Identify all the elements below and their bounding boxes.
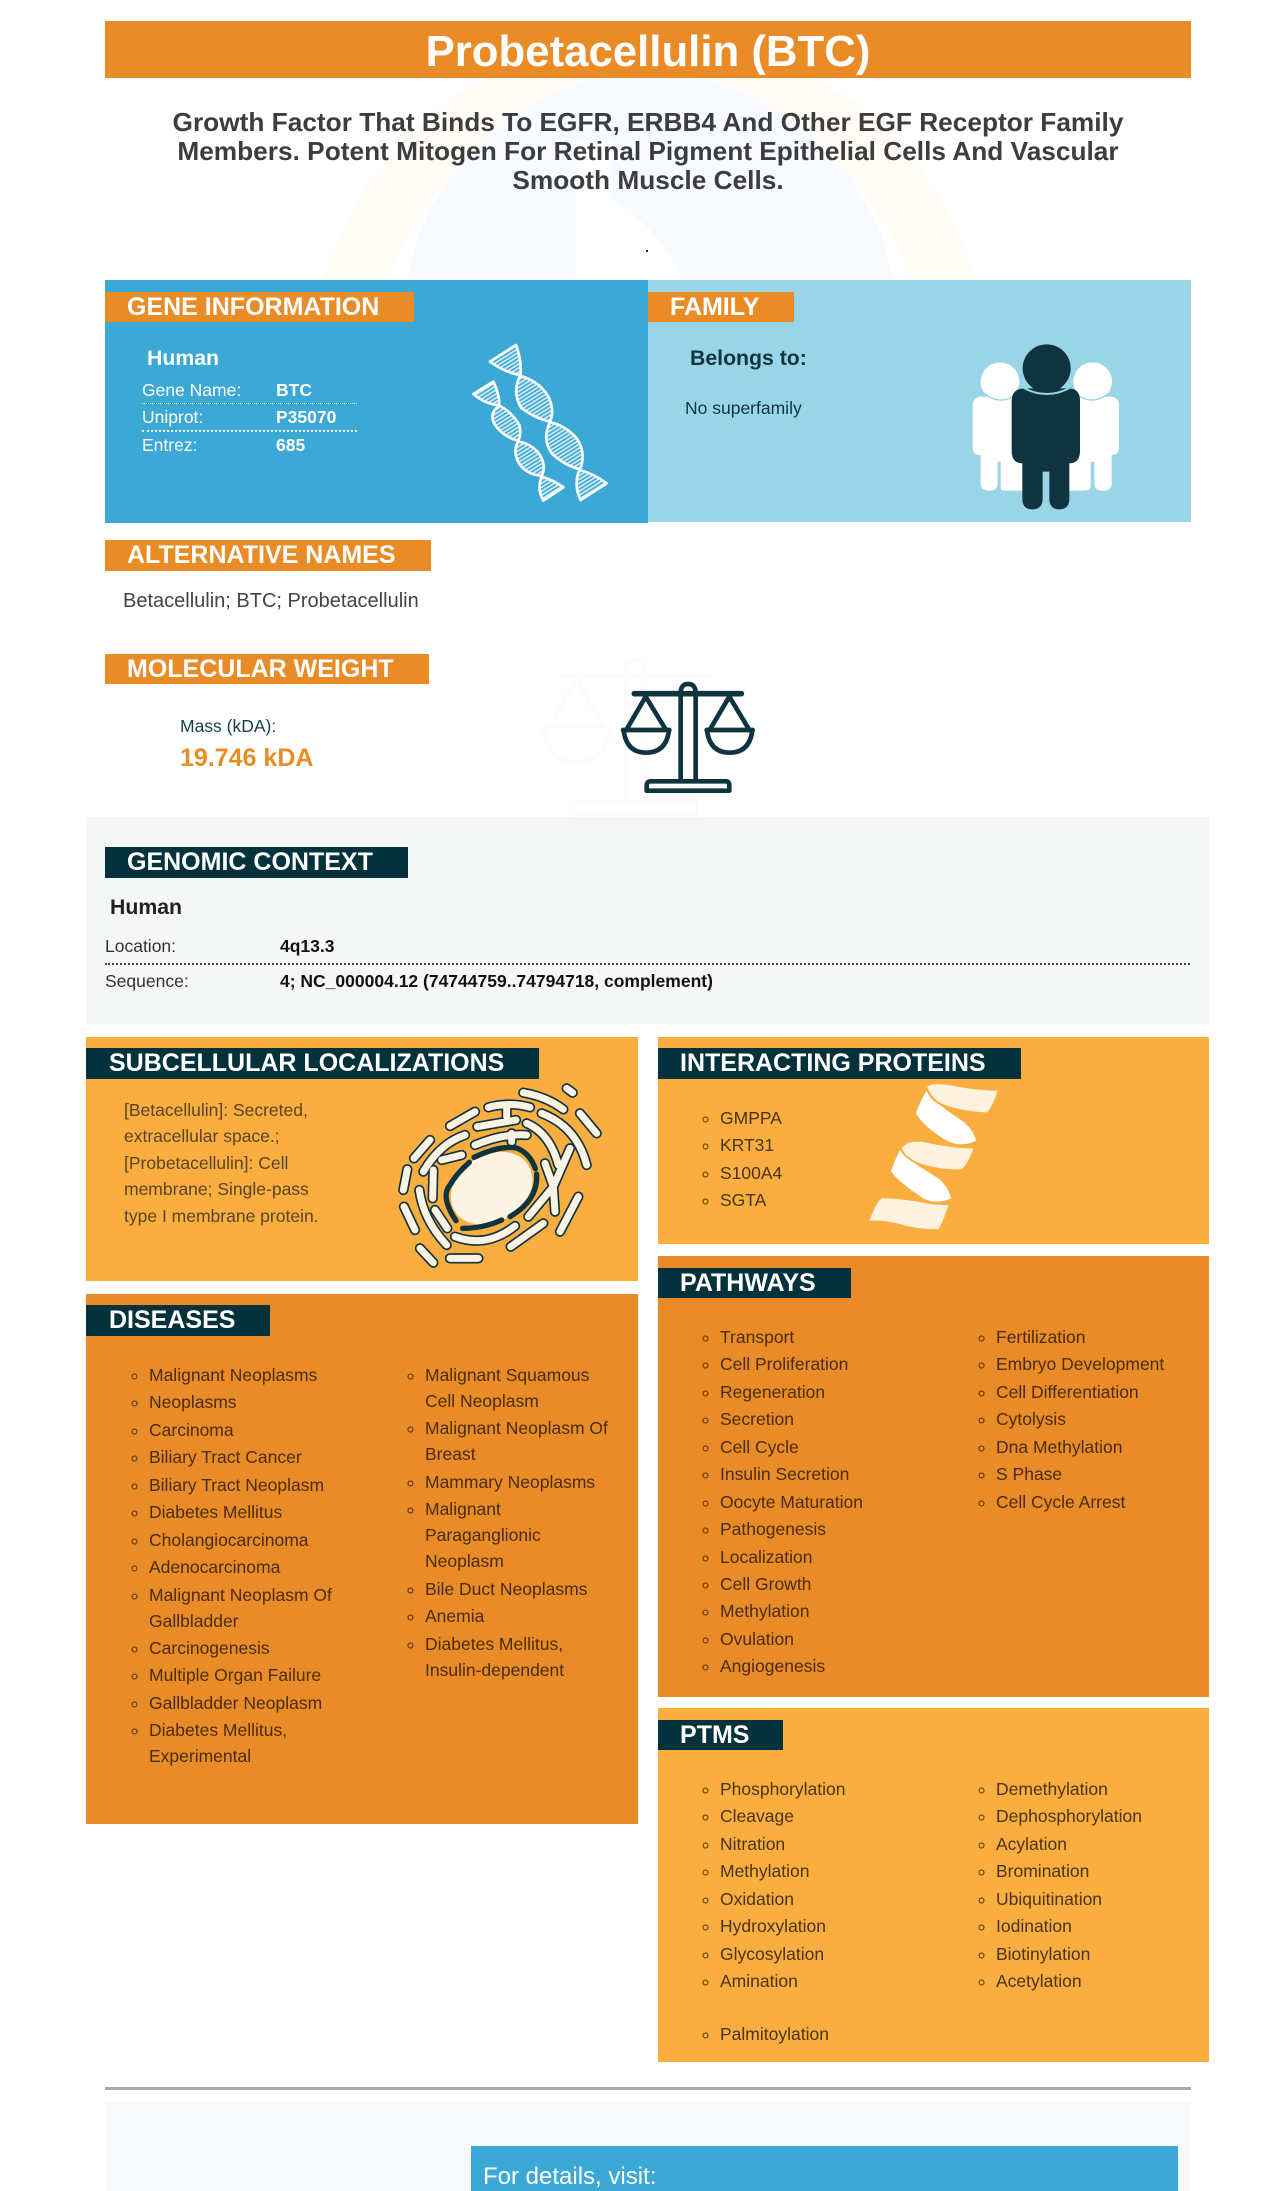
- mass label: Mass (kDA):: [180, 716, 276, 736]
- pathways list column 1: Cell Proliferation: [720, 1354, 848, 1374]
- heading: gene information: GENE INFORMATION: [127, 293, 379, 321]
- diseases list column 1: Multiple Organ Failure: [149, 1665, 321, 1685]
- heading: interacting proteins: INTERACTING PROTEINS: [680, 1049, 986, 1077]
- pathways list column 1: Cell Growth: [720, 1574, 811, 1594]
- title banner: [105, 21, 1191, 78]
- gene info table: BTC: [276, 380, 312, 400]
- diseases list column 1: Carcinogenesis: [149, 1638, 270, 1658]
- diseases list column 1: Experimental: [149, 1746, 251, 1766]
- diseases list column 1: Malignant Neoplasms: [149, 1365, 317, 1385]
- subtitle description: Members. Potent Mitogen For Retinal Pigment Epithelial Cells And Vascular: [177, 136, 1119, 166]
- PTMs list column 1: [702, 1779, 846, 1991]
- pathways list column 1: [702, 1327, 863, 1676]
- pathways list column 1: Transport: [720, 1327, 794, 1347]
- panel: gene information: [105, 280, 648, 523]
- PTMs list column 2: Acylation: [996, 1834, 1067, 1854]
- pathways list column 2: Cell Cycle Arrest: [996, 1492, 1125, 1512]
- PTMs list column 1: Glycosylation: [720, 1944, 824, 1964]
- heading: molecular weight: MOLECULAR WEIGHT: [127, 655, 394, 683]
- divider rule: [105, 2087, 1191, 2090]
- mass value: 19.746 kDA: [180, 744, 313, 772]
- footer panel: [105, 2102, 1191, 2191]
- subtitle description: Smooth Muscle Cells.: [512, 165, 784, 195]
- localization text: [Betacellulin]: Secreted,: [124, 1100, 308, 1120]
- icon: DNA strands: [472, 344, 608, 502]
- sequence row: 4; NC_000004.12 (74744759..74794718, complement): [280, 971, 713, 991]
- pathways list column 2: Dna Methylation: [996, 1437, 1122, 1457]
- PTMs list column 2: Dephosphorylation: [996, 1806, 1142, 1826]
- heading: family: FAMILY: [670, 293, 759, 321]
- small dot: [646, 250, 648, 252]
- PTMs list column 2: Bromination: [996, 1861, 1089, 1881]
- pathways list column 2: Cell Differentiation: [996, 1382, 1139, 1402]
- details text: For details, visit:: [483, 2163, 656, 2190]
- PTMs list column 2: Biotinylation: [996, 1944, 1090, 1964]
- background watermark: [325, 78, 975, 280]
- diseases list column 2: [408, 1365, 608, 1680]
- PTMs list column 2: [978, 1779, 1142, 1991]
- pathways list column 1: Ovulation: [720, 1629, 794, 1649]
- PTMs list column 1: Phosphorylation: [720, 1779, 846, 1799]
- location row: Location:: [105, 936, 176, 956]
- icon: cell with organelles: [398, 1083, 602, 1268]
- PTMs list column 1: Methylation: [720, 1861, 810, 1881]
- heading: PTMs: [658, 1720, 783, 1750]
- pathways list column 1: Secretion: [720, 1409, 794, 1429]
- subtitle description: [173, 107, 1124, 195]
- pathways list column 1: Methylation: [720, 1601, 810, 1621]
- diseases list column 1: Cholangiocarcinoma: [149, 1530, 309, 1550]
- diseases list column 1: Gallbladder: [149, 1610, 238, 1630]
- PTMs list column 1: Cleavage: [720, 1806, 794, 1826]
- PTMs list extra item: Palmitoylation: [720, 2024, 829, 2044]
- gene info table: [142, 380, 357, 455]
- belongs to label: Belongs to:: [690, 346, 807, 370]
- PTMs list column 1: Amination: [720, 1971, 798, 1991]
- localization text: extracellular space.;: [124, 1126, 280, 1146]
- interacting proteins list: GMPPA: [720, 1108, 782, 1128]
- diseases list column 2: Neoplasm: [425, 1551, 504, 1571]
- diseases list column 2: Malignant: [425, 1499, 501, 1519]
- heading: diseases: DISEASES: [109, 1306, 235, 1334]
- diseases list column 1: Diabetes Mellitus: [149, 1502, 282, 1522]
- pathways list column 1: Angiogenesis: [720, 1656, 825, 1676]
- diseases list column 1: Carcinoma: [149, 1420, 234, 1440]
- heading: diseases: [86, 1305, 270, 1336]
- gene info table: Gene Name:: [142, 380, 241, 400]
- icon: people group: [972, 344, 1119, 510]
- diseases list column 1: [132, 1365, 332, 1766]
- diseases list column 1: Malignant Neoplasm Of: [149, 1584, 332, 1604]
- gene info table: Entrez:: [142, 435, 197, 455]
- pathways list column 2: Cytolysis: [996, 1409, 1066, 1429]
- callout: details link box: [471, 2146, 1178, 2191]
- gene info table: 685: [276, 435, 305, 455]
- interacting proteins list: S100A4: [720, 1163, 782, 1183]
- interacting proteins list: SGTA: [720, 1190, 766, 1210]
- location row: 4q13.3: [280, 936, 334, 956]
- PTMs list column 2: Ubiquitination: [996, 1889, 1102, 1909]
- panel: interacting proteins: [658, 1037, 1209, 1244]
- pathways list column 1: Regeneration: [720, 1382, 825, 1402]
- diseases list column 2: Cell Neoplasm: [425, 1391, 539, 1411]
- location row: [105, 936, 334, 956]
- pathways list column 2: Fertilization: [996, 1327, 1085, 1347]
- diseases list column 1: Adenocarcinoma: [149, 1557, 280, 1577]
- diseases list column 2: Paraganglionic: [425, 1525, 541, 1545]
- species label: Human: [147, 346, 219, 370]
- heading: family: [648, 292, 794, 322]
- gene info table: P35070: [276, 407, 336, 427]
- title banner: Probetacellulin (BTC): [426, 27, 870, 76]
- superfamily text: No superfamily: [685, 398, 802, 418]
- panel: family: [648, 280, 1191, 522]
- panel: pathways: [658, 1256, 1209, 1697]
- pathways list column 2: [978, 1327, 1164, 1512]
- diseases list column 2: Malignant Squamous: [425, 1365, 589, 1385]
- PTMs list column 1: Oxidation: [720, 1889, 794, 1909]
- icon: ghost balance: [530, 650, 770, 820]
- pathways list column 1: Oocyte Maturation: [720, 1492, 863, 1512]
- diseases list column 2: Mammary Neoplasms: [425, 1472, 595, 1492]
- PTMs list column 2: Acetylation: [996, 1971, 1082, 1991]
- PTMs list column 2: Iodination: [996, 1916, 1072, 1936]
- heading: pathways: [658, 1268, 851, 1298]
- pathways list column 2: Embryo Development: [996, 1354, 1164, 1374]
- gene info table: Uniprot:: [142, 407, 203, 427]
- diseases list column 1: Neoplasms: [149, 1392, 237, 1412]
- diseases list column 1: Biliary Tract Neoplasm: [149, 1475, 324, 1495]
- localization text: [Probetacellulin]: Cell: [124, 1153, 288, 1173]
- subtitle description: Growth Factor That Binds To EGFR, ERBB4 And Other EGF Receptor Family: [173, 107, 1123, 137]
- localization text: type I membrane protein.: [124, 1206, 319, 1226]
- heading: alternative names: ALTERNATIVE NAMES: [127, 541, 396, 569]
- diseases list column 1: Biliary Tract Cancer: [149, 1447, 302, 1467]
- pathways list column 2: S Phase: [996, 1464, 1062, 1484]
- diseases list column 2: Anemia: [425, 1606, 484, 1626]
- heading: pathways: PATHWAYS: [680, 1269, 816, 1297]
- diseases list column 2: Malignant Neoplasm Of: [425, 1418, 608, 1438]
- panel: subcellular localizations: [86, 1037, 638, 1281]
- panel: PTMs: [658, 1708, 1209, 2062]
- diseases list column 2: Diabetes Mellitus,: [425, 1634, 563, 1654]
- pathways list column 1: Localization: [720, 1546, 812, 1566]
- diseases list column 2: Bile Duct Neoplasms: [425, 1579, 587, 1599]
- localization text: [124, 1100, 319, 1226]
- diseases list column 1: Diabetes Mellitus,: [149, 1720, 287, 1740]
- pathways list column 1: Pathogenesis: [720, 1519, 826, 1539]
- PTMs list column 1: Nitration: [720, 1834, 785, 1854]
- interacting proteins list: [702, 1108, 782, 1210]
- PTMs list column 2: Demethylation: [996, 1779, 1108, 1799]
- sequence row: Sequence:: [105, 971, 189, 991]
- alternative names text: Betacellulin; BTC; Probetacellulin: [123, 590, 419, 612]
- pathways list column 1: Cell Cycle: [720, 1437, 799, 1457]
- diseases list column 2: Insulin-dependent: [425, 1660, 564, 1680]
- species label: Human: [110, 895, 182, 919]
- localization text: membrane; Single-pass: [124, 1179, 309, 1199]
- diseases list column 2: Breast: [425, 1444, 476, 1464]
- heading: PTMs: PTMS: [680, 1721, 749, 1749]
- PTMs list column 1: Hydroxylation: [720, 1916, 826, 1936]
- icon: balance scale: [620, 682, 755, 793]
- heading: subcellular localizations: SUBCELLULAR LOCALIZATIONS: [109, 1049, 504, 1077]
- heading: genomic context: GENOMIC CONTEXT: [127, 848, 373, 876]
- panel: genomic context: [86, 817, 1209, 1024]
- interacting proteins list: KRT31: [720, 1135, 774, 1155]
- diseases list column 1: Gallbladder Neoplasm: [149, 1693, 322, 1713]
- icon: protein ribbon: [869, 1084, 998, 1230]
- pathways list column 1: Insulin Secretion: [720, 1464, 849, 1484]
- panel: diseases: [86, 1294, 638, 1824]
